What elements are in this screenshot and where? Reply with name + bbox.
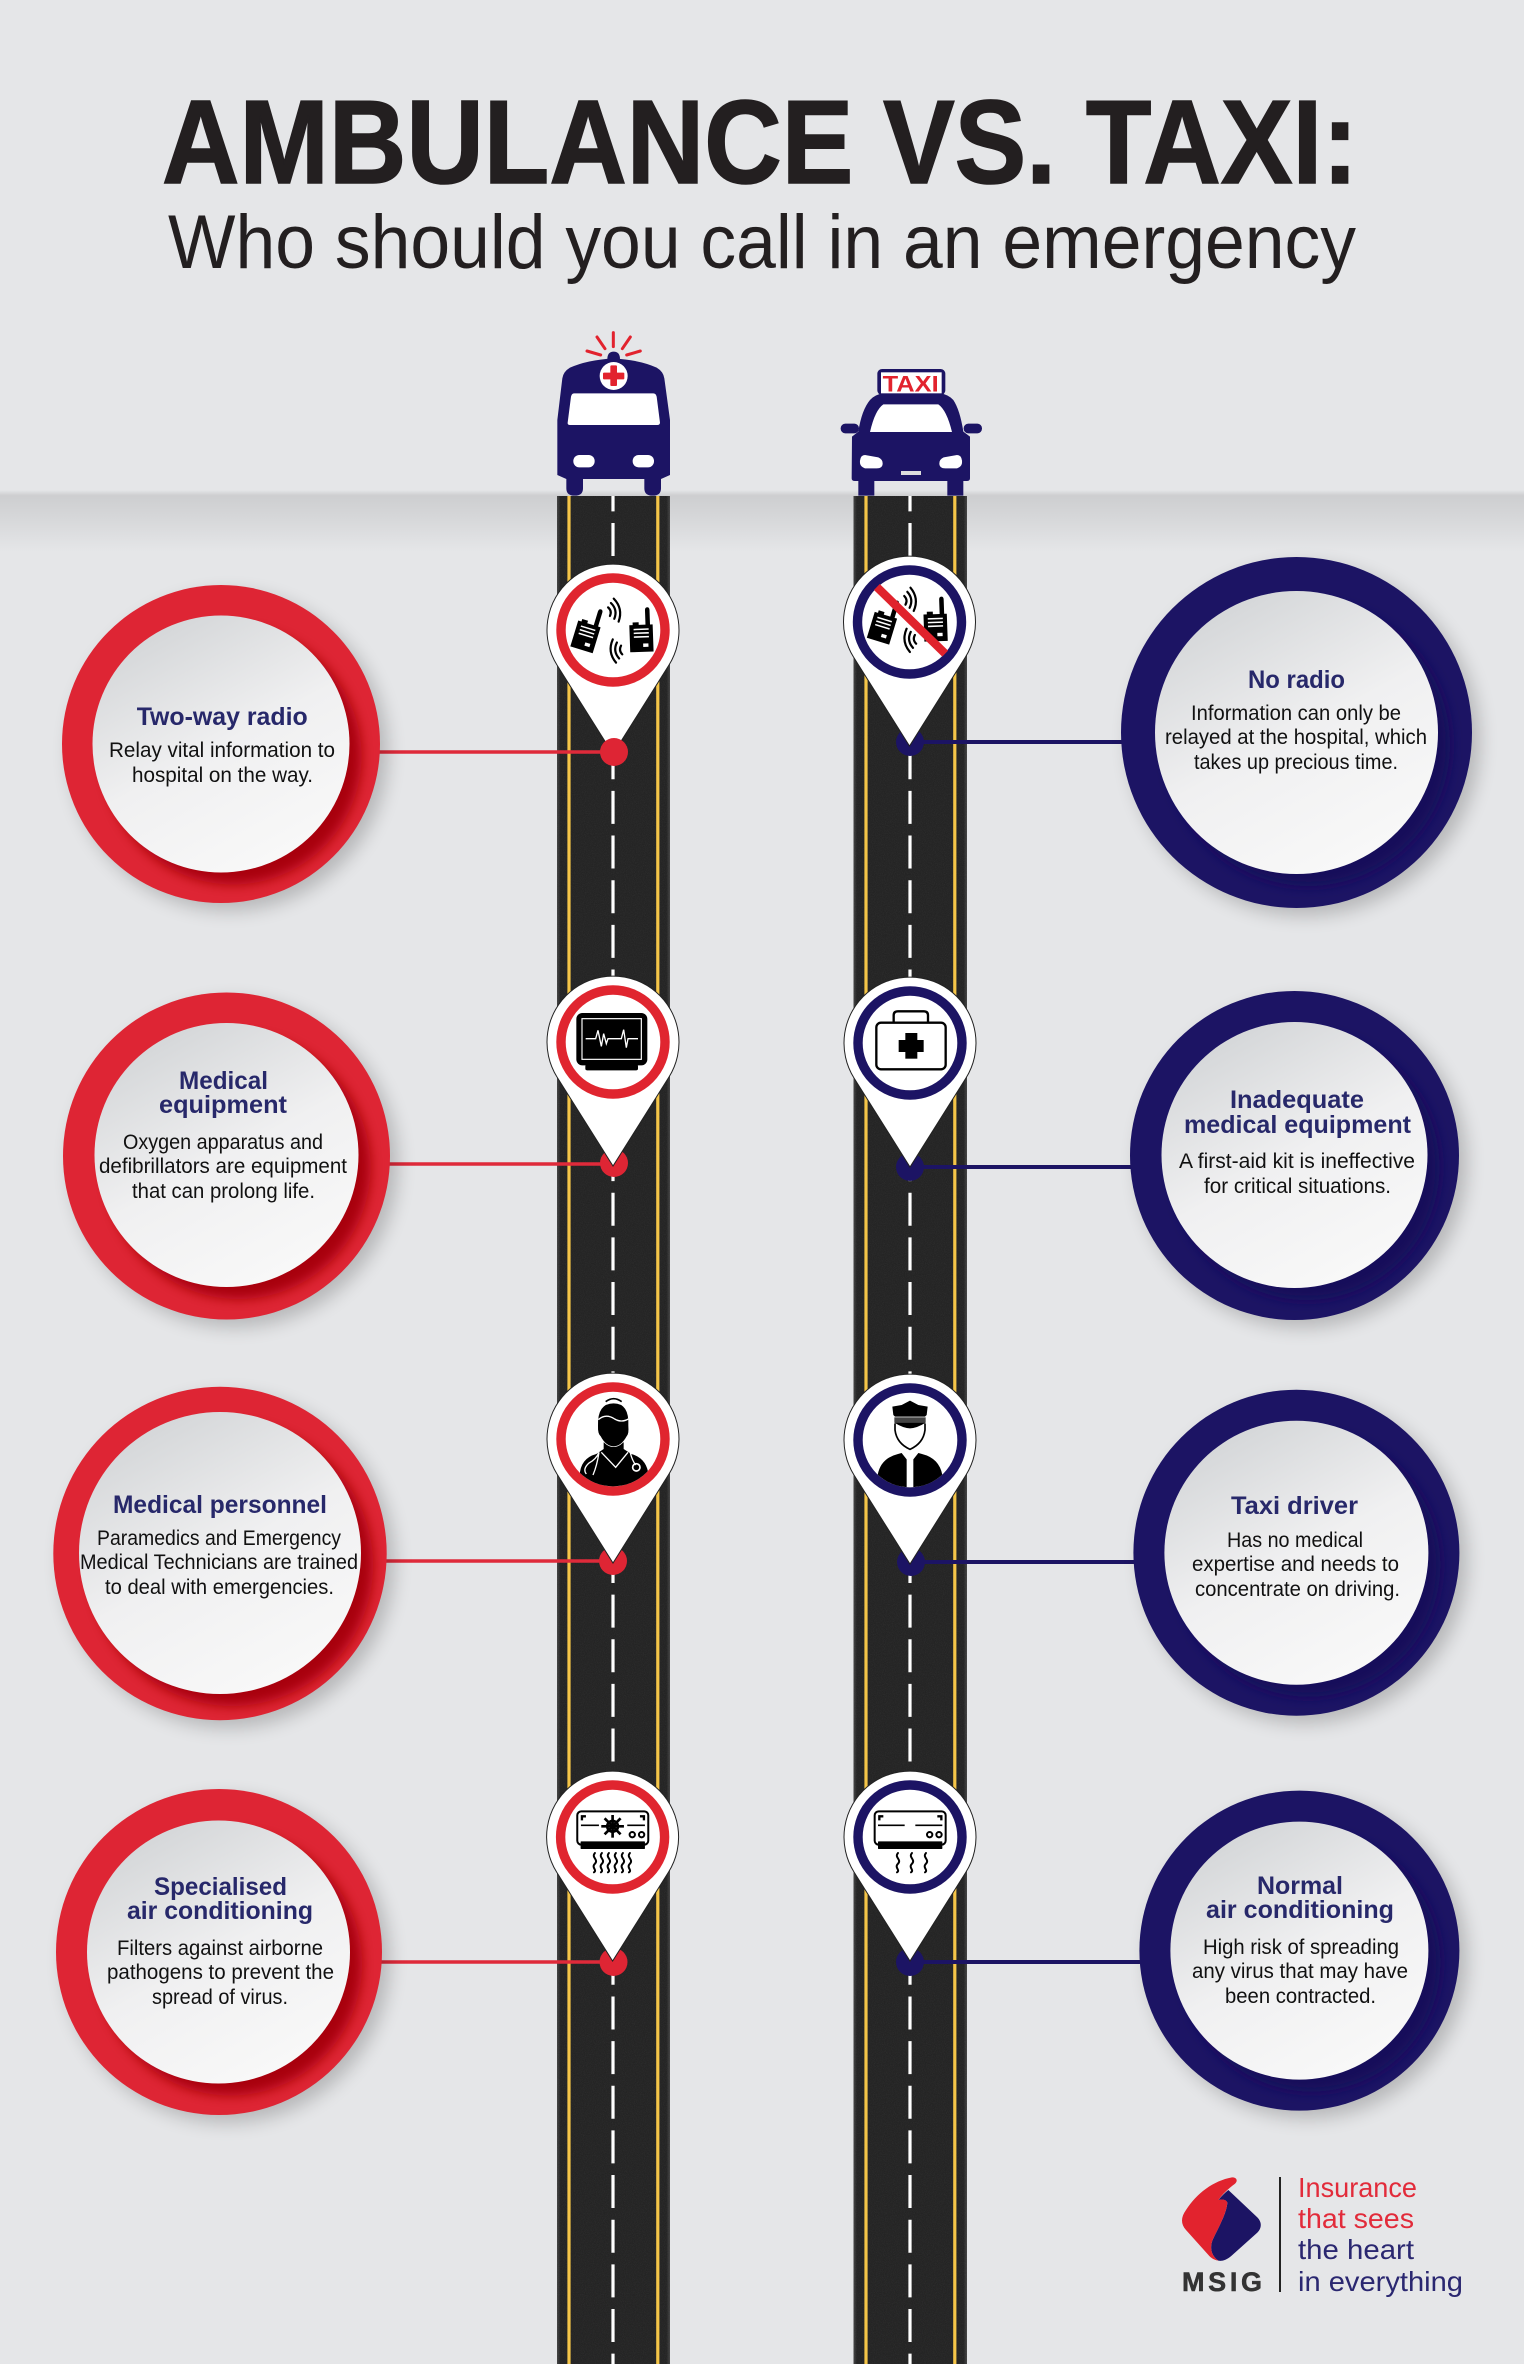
heading: Normal	[1257, 1872, 1343, 1900]
body text	[1192, 1936, 1408, 2008]
heading: Two-way radio	[137, 703, 308, 731]
connector: taxi driver	[897, 1548, 1138, 1576]
logo: MSIG	[1182, 2172, 1463, 2297]
subtitle: Who should you call in an emergency	[168, 200, 1356, 285]
heading	[1206, 1872, 1394, 1924]
panel: medical equipment	[63, 992, 398, 1328]
body text	[109, 739, 335, 787]
body text: relayed at the hospital, which	[1165, 726, 1427, 749]
body text: to deal with emergencies.	[105, 1576, 334, 1599]
heading: air conditioning	[127, 1897, 313, 1925]
body text: spread of virus.	[152, 1986, 288, 2009]
heading: Taxi driver	[1231, 1492, 1358, 1520]
body text: Information can only be	[1191, 702, 1401, 725]
connector: no radio	[896, 728, 1125, 756]
body text: takes up precious time.	[1194, 751, 1398, 774]
body text	[107, 1937, 334, 2009]
body text: expertise and needs to	[1192, 1553, 1399, 1576]
pin: normal air conditioning	[844, 1771, 976, 1961]
connector: medical equipment	[385, 1149, 628, 1177]
body text: been contracted.	[1225, 1985, 1376, 2008]
body text: defibrillators are equipment	[99, 1155, 347, 1178]
road: ambulance	[557, 496, 670, 2364]
body text: Filters against airborne	[117, 1937, 323, 1960]
horizon shadow band	[0, 490, 1524, 552]
pin: two-way radio	[547, 564, 679, 754]
body text: Oxygen apparatus and	[123, 1131, 323, 1154]
road: taxi	[854, 496, 967, 2364]
icon: taxi: TAXI	[883, 372, 939, 397]
body text	[1179, 1150, 1415, 1198]
pin: no radio	[844, 556, 976, 746]
heading: air conditioning	[1206, 1896, 1394, 1924]
panel: normal air conditioning	[1139, 1791, 1467, 2119]
tagline: in everything	[1298, 2266, 1463, 2297]
connector: normal ac	[896, 1948, 1143, 1976]
heading: No radio	[1248, 666, 1345, 694]
body text	[80, 1527, 358, 1599]
pin: specialised air conditioning	[547, 1771, 679, 1961]
panel: no radio	[1121, 557, 1480, 916]
connector: inadequate equipment	[896, 1153, 1135, 1181]
panel: inadequate medical equipment	[1130, 991, 1467, 1328]
icon: MSIG mark	[1182, 2177, 1261, 2261]
heading: Inadequate	[1230, 1086, 1364, 1114]
body text: pathogens to prevent the	[107, 1961, 334, 1984]
body text: hospital on the way.	[132, 764, 313, 787]
heading: Medical personnel	[113, 1491, 327, 1519]
tagline	[1298, 2172, 1463, 2297]
body text: that can prolong life.	[132, 1180, 315, 1203]
body text: Paramedics and Emergency	[97, 1527, 341, 1550]
heading: equipment	[159, 1091, 288, 1119]
body text: for critical situations.	[1204, 1175, 1391, 1198]
panel: medical personnel	[53, 1387, 395, 1728]
body text	[99, 1131, 347, 1203]
body text	[1192, 1529, 1400, 1601]
body text: Has no medical	[1227, 1529, 1363, 1552]
panel: taxi driver	[1133, 1390, 1467, 1724]
tagline: the heart	[1298, 2234, 1414, 2265]
heading	[127, 1873, 313, 1925]
heading	[1184, 1086, 1412, 1139]
pin: first-aid kit	[844, 977, 976, 1167]
icon: taxi	[841, 369, 982, 496]
heading	[159, 1067, 288, 1119]
panel: specialised air conditioning	[56, 1789, 390, 2123]
pin: medical equipment	[547, 976, 679, 1166]
body text: concentrate on driving.	[1195, 1578, 1400, 1601]
pin: taxi driver	[844, 1374, 976, 1564]
body text: any virus that may have	[1192, 1960, 1408, 1983]
pin: medical personnel	[547, 1373, 679, 1563]
body text: Medical Technicians are trained	[80, 1551, 358, 1574]
body text: High risk of spreading	[1203, 1936, 1399, 1959]
title: AMBULANCE VS. TAXI:	[162, 76, 1358, 209]
connector: medical personnel	[382, 1547, 627, 1575]
heading: Medical	[179, 1067, 268, 1095]
body text	[1165, 702, 1427, 774]
tagline: Insurance	[1298, 2172, 1417, 2203]
connector: specialised ac	[378, 1948, 628, 1976]
panel: two-way radio	[62, 585, 388, 911]
dot: two-way radio	[600, 738, 628, 766]
heading: medical equipment	[1184, 1111, 1412, 1139]
wordmark: MSIG	[1182, 2267, 1262, 2297]
heading: Specialised	[154, 1873, 287, 1901]
body text: A first-aid kit is ineffective	[1179, 1150, 1415, 1173]
body text: Relay vital information to	[109, 739, 335, 762]
connector: two-way radio	[375, 750, 613, 754]
tagline: that sees	[1298, 2203, 1414, 2234]
icon: ambulance	[557, 333, 670, 496]
